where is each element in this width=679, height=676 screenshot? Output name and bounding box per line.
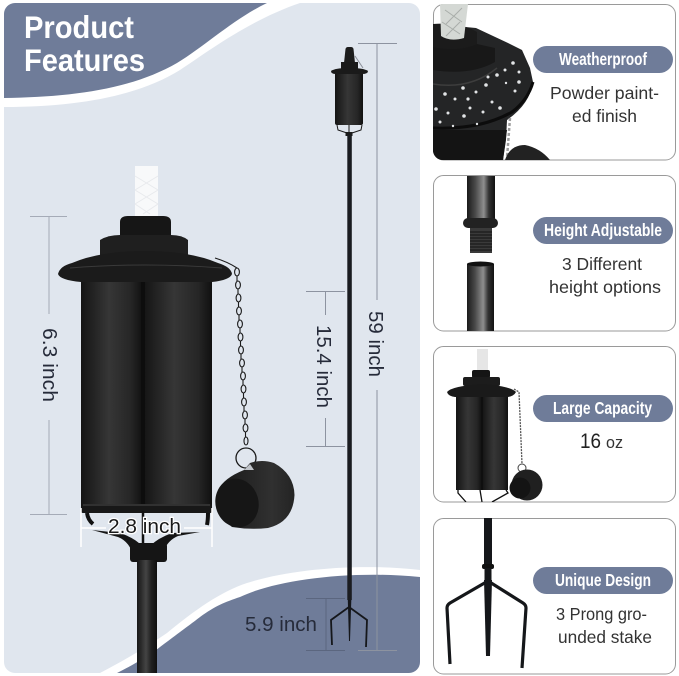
dimension: stake 5.9 inch <box>245 598 345 650</box>
dimension: height of canister 6.3 inch: 6.3 inch <box>38 328 61 402</box>
description <box>556 604 652 647</box>
cage <box>87 513 208 525</box>
description <box>550 83 659 126</box>
ground wave <box>100 567 420 673</box>
banner: product features <box>4 3 300 107</box>
description: oz <box>606 434 623 452</box>
panel: weatherproof <box>433 4 676 160</box>
dimension: total height 59 inch <box>358 43 397 650</box>
snuffer cup <box>210 461 294 532</box>
photo: three prong stake <box>447 518 526 668</box>
dimension: diameter 2.8 inch <box>81 508 212 547</box>
body <box>81 268 143 511</box>
brim <box>58 251 232 282</box>
photo: threaded pole joint <box>463 176 498 331</box>
pole <box>137 560 157 673</box>
dimension: section height 15.4 inch <box>306 291 345 446</box>
label pill <box>533 217 673 244</box>
panel: product dimensions <box>4 3 420 673</box>
label pill <box>533 46 673 73</box>
description: ed finish <box>572 106 637 126</box>
dimension: stake 5.9 inch: 5.9 inch <box>245 613 317 636</box>
heading <box>24 9 145 78</box>
dimension: diameter 2.8 inch: 2.8 inch <box>108 515 181 538</box>
description <box>549 254 661 297</box>
description: height options <box>549 277 661 297</box>
description <box>580 430 623 453</box>
three prong stake <box>331 607 367 647</box>
heading: Features <box>24 42 145 78</box>
heading: Product <box>24 9 134 45</box>
label pill <box>533 567 673 594</box>
panel: large capacity <box>434 346 676 502</box>
description: Powder paint- <box>550 83 659 103</box>
photo: water droplets on brim <box>433 4 550 160</box>
description: 3 Prong gro- <box>556 604 647 624</box>
label pill: Weatherproof <box>559 49 647 69</box>
dimension: total height 59 inch: 59 inch <box>364 311 387 377</box>
label pill: Large Capacity <box>553 398 652 418</box>
description: 3 Different <box>562 254 642 274</box>
panel: unique design <box>434 518 676 674</box>
torch neck and collar <box>120 216 171 238</box>
large torch <box>58 166 294 673</box>
wick <box>135 166 158 216</box>
photo: torch canister <box>447 349 542 502</box>
small full height torch <box>331 47 368 647</box>
label pill: Unique Design <box>555 570 651 590</box>
dimension: section height 15.4 inch: 15.4 inch <box>312 325 335 408</box>
chain <box>215 258 256 468</box>
dimension: height of canister 6.3 inch <box>30 216 67 514</box>
label pill <box>533 395 673 422</box>
description: unded stake <box>558 627 652 647</box>
panel: height adjustable <box>434 176 676 331</box>
description: 16 <box>580 430 601 453</box>
